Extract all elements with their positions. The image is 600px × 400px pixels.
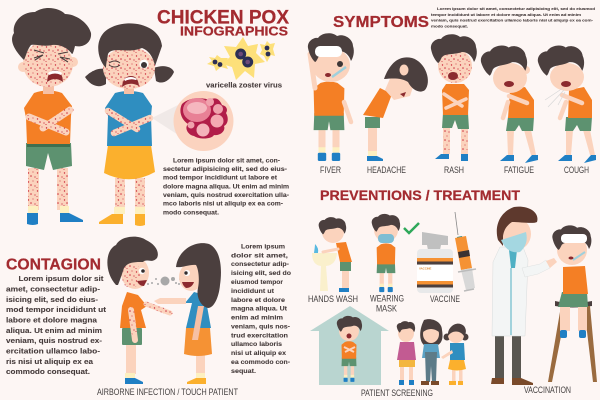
- symptom: rash: [431, 34, 477, 161]
- trousers: [495, 335, 504, 379]
- paragraph: description: dolore magna aliqua. Ut enim ad minim: [163, 183, 289, 190]
- paragraph: description: Lorem ipsum dolor sit amet, con-: [173, 157, 280, 164]
- paragraph: symptoms: Lorem ipsum dolor sit amet, consectetur adipisicing elit, sed do eiusmod: [437, 6, 596, 11]
- big boy with rash: [12, 8, 91, 225]
- hair: [536, 43, 585, 76]
- heading: symptoms: SYMPTOMS: [333, 14, 429, 31]
- thermometer: [332, 67, 346, 77]
- boy: [342, 270, 349, 288]
- paragraph: contagion right: consectetur adip-: [231, 261, 289, 268]
- paragraph: contagion: ercitation ullamco labo-: [6, 348, 101, 356]
- head: [23, 41, 73, 87]
- label text: VACCINE: [419, 266, 432, 270]
- stool: [548, 301, 597, 382]
- paragraph: symptoms: veniam, quis nostrud exercitation ullamco laboris nisi ut aliquip ex ea com-: [431, 18, 594, 22]
- symptom: headache: [363, 57, 428, 161]
- shorts: [26, 143, 72, 170]
- mask: [378, 234, 394, 243]
- shirt: [563, 266, 588, 294]
- symptom: cough: [536, 43, 596, 163]
- coat opening line: [510, 268, 512, 335]
- paragraph: contagion right: [231, 244, 291, 375]
- cap: [422, 232, 448, 250]
- shirt: [363, 88, 392, 118]
- label: wearing mask: MASK: [376, 304, 397, 314]
- label: hands wash: HANDS WASH: [308, 294, 358, 304]
- paragraph: description: veniam, quis nostrud exercitation ulla-: [163, 192, 289, 199]
- legs: [560, 306, 570, 331]
- eye and mouth: [139, 268, 145, 274]
- shoes: [491, 378, 504, 384]
- shorts: [365, 117, 380, 128]
- paragraph: contagion: veniam, quis nostrud ex-: [6, 338, 103, 345]
- virus label: varicella zoster virus: [206, 82, 282, 90]
- head: [312, 48, 350, 82]
- shirt: [185, 292, 211, 328]
- paragraph: contagion right: ea commodo con-: [231, 359, 290, 366]
- label: fatigue: FATIGUE: [504, 165, 534, 175]
- eye: [109, 60, 148, 68]
- cough spray: [545, 88, 565, 107]
- reaching arm: [154, 298, 186, 304]
- paragraph: contagion right: labore et dolore: [231, 297, 285, 304]
- face mask: [501, 232, 527, 252]
- hair: [497, 207, 537, 246]
- paragraph: contagion right: enim ad minim: [231, 314, 283, 322]
- title: [157, 8, 289, 38]
- hair: [98, 23, 162, 68]
- paragraph: description: [163, 157, 289, 216]
- shoe: [187, 378, 206, 384]
- shoes: [435, 154, 468, 161]
- crossed arms: [444, 94, 466, 108]
- head: [374, 218, 398, 242]
- shoes: [99, 214, 145, 226]
- hair: [308, 33, 354, 62]
- label: headache: HEADACHE: [367, 165, 406, 175]
- legs: [368, 128, 377, 156]
- neck: [43, 82, 54, 94]
- child: girl in yellow skirt: [441, 324, 468, 385]
- paragraph: contagion right: sequat.: [231, 368, 256, 375]
- paragraph: symptoms: [431, 6, 596, 28]
- heading: preventions: PREVENTIONS / TREATMENT: [320, 188, 521, 203]
- head: [438, 49, 472, 83]
- shorts: [122, 328, 142, 345]
- paragraph: contagion right: veniam, quis nos-: [231, 324, 290, 330]
- label: wearing mask: WEARING: [370, 294, 404, 304]
- white coat: [492, 247, 528, 336]
- cold compress: [315, 46, 342, 57]
- paragraph: contagion right: trud exercitation: [231, 332, 288, 340]
- pigtails: [85, 69, 106, 86]
- head: [493, 63, 527, 93]
- legs: [126, 344, 136, 374]
- title: INFOGRAPHICS: [180, 24, 288, 38]
- mouth: [400, 92, 406, 97]
- hand: [400, 64, 408, 76]
- shorts: [442, 113, 469, 129]
- vaccine bottle: [417, 232, 453, 293]
- child patient: [552, 225, 591, 338]
- paragraph: contagion: Lorem ipsum dolor sit: [18, 276, 104, 283]
- label: patient screening: PATIENT SCREENING: [361, 388, 433, 398]
- neck: [124, 84, 134, 94]
- raised arm: [310, 54, 315, 88]
- shirt: [24, 90, 72, 144]
- zoom pointer cone: [152, 103, 186, 140]
- shoes: [27, 213, 83, 225]
- hair: [12, 8, 91, 60]
- house: [310, 306, 389, 385]
- arm with rash forward: [146, 304, 170, 313]
- paragraph: contagion right: ullamco laboris: [231, 341, 282, 348]
- paragraph: description: mod tempor incididunt ut labore et: [163, 175, 278, 182]
- mouth: [568, 256, 574, 260]
- paragraph: contagion: isicing elit, sed do eius-: [6, 297, 99, 304]
- closed eyes: [34, 50, 70, 62]
- title: CHICKEN POX: [157, 8, 289, 28]
- girl with rash: [85, 23, 174, 226]
- arm: [509, 96, 527, 103]
- legs: [566, 130, 595, 155]
- label: fever: FIVER: [320, 165, 341, 175]
- leg: [196, 355, 205, 373]
- blister close-up: [174, 91, 234, 151]
- mouth: [448, 72, 458, 80]
- paragraph: contagion right: magna aliqua. Ut: [231, 306, 288, 312]
- compress: [561, 234, 587, 243]
- hair: [384, 57, 428, 92]
- water and soap: [314, 244, 318, 253]
- head: [179, 263, 203, 291]
- paragraph: contagion right: isicing elit, sed do: [231, 270, 291, 277]
- shirt: [568, 87, 592, 118]
- symptom: fever: [308, 33, 354, 161]
- shoe: [125, 378, 143, 384]
- shoes: [500, 155, 538, 163]
- shorts: [506, 117, 534, 131]
- hair: [431, 34, 477, 63]
- shirt: [105, 91, 152, 146]
- symptom: fatigue: [479, 43, 538, 163]
- airborne droplets: [147, 276, 181, 286]
- prevention: hands wash: [312, 217, 352, 292]
- legs: [507, 130, 536, 155]
- mouth: [122, 76, 139, 87]
- lower arm: [192, 306, 204, 340]
- skirt: [104, 145, 155, 179]
- check mark: [404, 223, 419, 233]
- undershirt: [509, 250, 517, 268]
- paragraph: contagion right: dolor sit amet,: [231, 252, 288, 260]
- shirt: [442, 84, 469, 115]
- head: [557, 235, 587, 265]
- boy in house: [337, 316, 362, 382]
- neck and head: [385, 74, 414, 100]
- heading: contagion: CONTAGION: [6, 256, 101, 274]
- thermometer: [573, 252, 585, 260]
- mouth: [47, 70, 63, 82]
- label: rash: RASH: [444, 165, 464, 175]
- child: purple shirt: [397, 321, 416, 385]
- eyes: [337, 61, 343, 67]
- paragraph: contagion right: incididunt ut: [231, 288, 275, 295]
- body: [417, 249, 453, 293]
- paragraph: description: mco laboris nisi ut aliquip ex ea com-: [163, 201, 283, 208]
- paragraph: contagion right: eiusmod tempor: [231, 279, 284, 286]
- legs: [28, 168, 69, 213]
- paragraph: contagion: amet, consectetur adip-: [6, 286, 101, 294]
- paragraph: contagion: labore et dolore magna: [6, 318, 97, 324]
- paragraph: contagion: aliqua. Ut enim ad minim: [6, 328, 102, 335]
- crossed arms: [29, 110, 70, 132]
- arm: [522, 260, 550, 277]
- child: girl in overalls: [420, 319, 443, 385]
- virus illustration: [207, 37, 275, 80]
- shirt: [508, 87, 534, 118]
- paragraph: contagion right: nisi ut aliquip ex: [231, 350, 286, 357]
- arm with rash down: [131, 310, 135, 340]
- paragraph: symptoms: modo consequat.: [431, 23, 468, 28]
- shoes: [558, 155, 596, 163]
- legs: [443, 128, 450, 154]
- label: cough: COUGH: [564, 165, 589, 175]
- contagion boy: [107, 237, 170, 384]
- label: wearing mask: [370, 294, 404, 314]
- shoes: [560, 330, 567, 338]
- label: vaccination: VACCINATION: [524, 385, 571, 395]
- skirt: [184, 328, 212, 356]
- label: vaccine: VACCINE: [430, 294, 460, 304]
- shoe: [367, 156, 383, 161]
- paragraph: description: sectetur adipisicing elit, sed do eius-: [163, 166, 287, 173]
- prevention: wearing mask: [372, 214, 400, 292]
- shorts: [558, 292, 588, 307]
- paragraph: contagion: commodo consequat.: [6, 369, 90, 376]
- crossed arms: [108, 111, 150, 133]
- paragraph: contagion right: Lorem ipsum: [241, 244, 285, 250]
- head: [121, 257, 149, 289]
- paragraph: contagion: ris nisi ut aliquip ex ea: [6, 359, 93, 366]
- arm: [562, 95, 582, 103]
- head: [103, 47, 155, 89]
- head: [501, 218, 531, 250]
- mouth: [561, 81, 571, 87]
- mouth: [325, 73, 331, 77]
- legs: [115, 178, 125, 210]
- hair: [107, 237, 158, 285]
- screened children: [397, 319, 468, 385]
- doctor: [491, 207, 557, 385]
- paragraph: symptoms: tempor incididunt ut labore et dolore magna aliqua. Ut enim ad minim: [431, 12, 582, 17]
- paragraph: contagion: [6, 276, 107, 376]
- caption: contagion: AIRBORNE INFECTION / TOUCH PATIENT: [97, 387, 239, 397]
- hair: [372, 214, 400, 232]
- paragraph: description: modo consequat.: [163, 209, 219, 216]
- head: [550, 63, 584, 91]
- syringe: [455, 212, 476, 291]
- paragraph: contagion: mod tempor incididunt ut: [6, 307, 107, 314]
- mouth: [504, 81, 514, 87]
- shirt: [120, 292, 147, 328]
- sink: [312, 253, 337, 291]
- contagion girl: [154, 243, 221, 384]
- hair: [479, 43, 528, 76]
- eye and mouth: [184, 270, 190, 276]
- hair: [552, 225, 591, 250]
- shorts: [565, 117, 592, 131]
- hair: [176, 243, 221, 308]
